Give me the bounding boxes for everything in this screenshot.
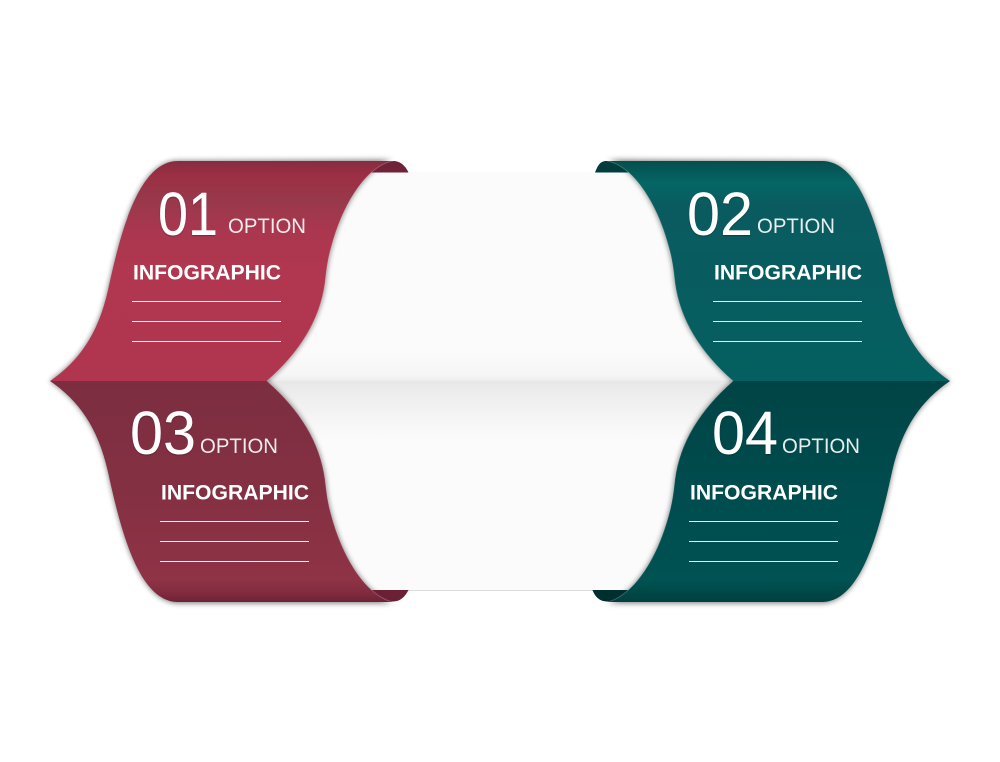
heading 02: INFOGRAPHIC [714,262,862,284]
option label 02: OPTION [757,215,835,238]
panel 03 [50,381,393,602]
number 01: 01 [158,180,218,248]
fold: top left [360,161,408,172]
text lines 03 [160,522,309,562]
fold: top right [595,161,640,172]
panel 02 [607,161,950,381]
text lines 01 [132,302,281,342]
panel shadows [50,160,950,603]
heading 01: INFOGRAPHIC [133,262,281,284]
number 04: 04 [712,399,778,467]
center white panel [267,172,733,590]
number 03: 03 [130,399,196,467]
fold: bottom right [592,590,640,602]
option label 03: OPTION [200,435,278,458]
panel 01 [50,161,393,381]
text lines 04 [689,522,838,562]
heading 04: INFOGRAPHIC [690,482,838,504]
text lines 02 [713,302,862,342]
heading 03: INFOGRAPHIC [161,482,309,504]
option label 04: OPTION [782,435,860,458]
panel 04 [607,381,950,602]
fold: bottom left [360,590,408,602]
option label 01: OPTION [228,215,306,238]
number 02: 02 [687,180,753,248]
